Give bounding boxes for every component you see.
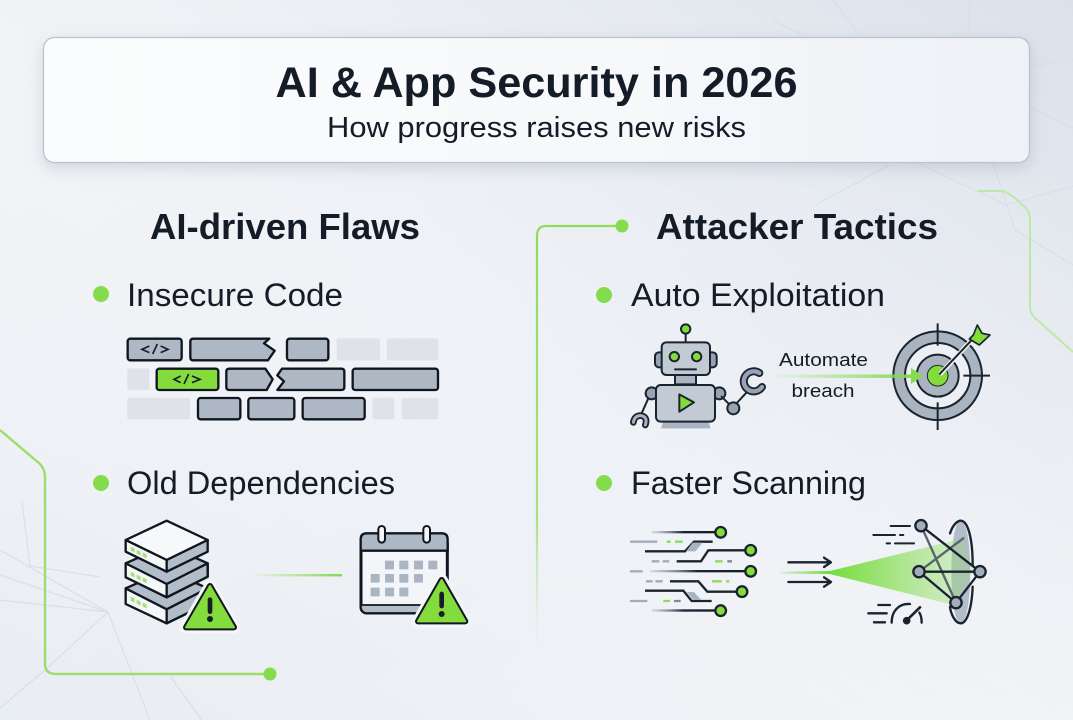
circuit line: centre divider [537, 220, 628, 645]
icon: server stack with warning [126, 521, 235, 628]
heading: Attacker Tactics: Attacker Tactics [656, 206, 938, 247]
item: Insecure Code label: Insecure Code [127, 277, 343, 313]
icon: calendar with warning [361, 526, 466, 622]
icon: robot [633, 324, 762, 428]
item: Auto Exploitation label: Auto Exploitation [631, 277, 885, 313]
icon: target with arrow [893, 323, 990, 430]
icon: fast data streams [630, 527, 756, 616]
subtitle: How progress raises new risks [327, 112, 746, 144]
arrows: scan direction [788, 558, 831, 587]
text: Automate breach: breach [792, 380, 854, 401]
item: Old Dependencies label: Old Dependencies [127, 465, 395, 501]
title card [44, 38, 1030, 162]
text: Automate breach [779, 349, 868, 401]
title: AI & App Security in 2026 [276, 59, 798, 107]
icon: code blocks [127, 338, 438, 419]
heading: AI-driven Flaws: AI-driven Flaws [150, 206, 420, 247]
arrow: automate breach [768, 368, 923, 384]
icon: speed gauge [868, 604, 922, 623]
circuit line: top right [978, 191, 1073, 352]
icon: scanning cone and network [780, 520, 986, 623]
text: Automate breach: Automate [779, 349, 868, 370]
circuit line: bottom left [0, 430, 276, 680]
item: Faster Scanning label: Faster Scanning [631, 465, 866, 501]
connector: server to calendar [250, 574, 342, 576]
